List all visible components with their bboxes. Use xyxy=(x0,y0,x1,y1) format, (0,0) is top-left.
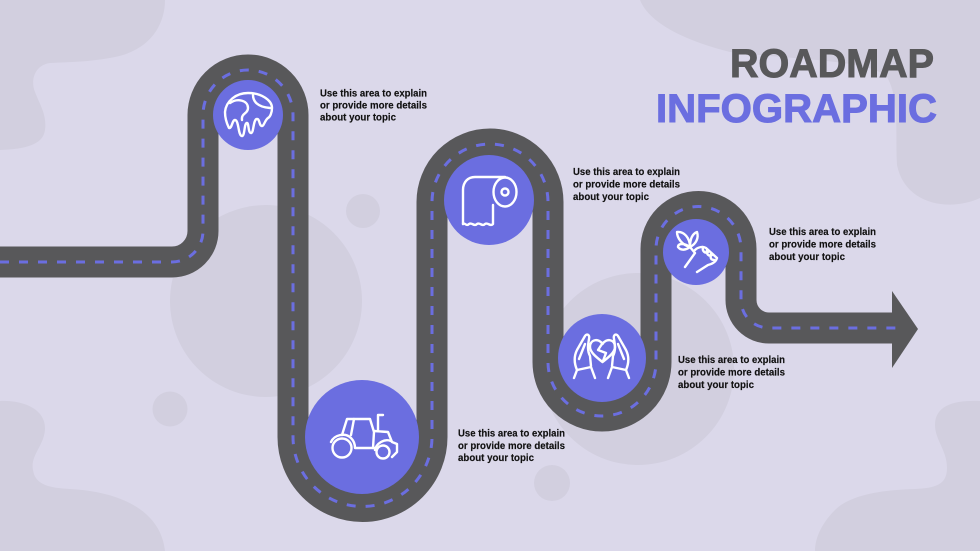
step 2: tractor icon circle xyxy=(305,380,419,494)
text block 4: Use this area to explain xyxy=(678,355,785,366)
road with arrow xyxy=(0,70,918,506)
text block 5: about your topic xyxy=(769,252,845,263)
step 1: globe icon circle xyxy=(213,80,283,150)
title: INFOGRAPHIC xyxy=(656,87,937,131)
title: ROADMAP xyxy=(730,42,934,86)
text block 4: or provide more details xyxy=(678,368,785,378)
step 5: hand holding plant icon circle xyxy=(663,219,729,285)
text block 5: or provide more details xyxy=(769,240,876,250)
step 3: toilet roll icon circle xyxy=(444,155,534,245)
text block 5: Use this area to explain xyxy=(769,227,876,238)
text block 2: or provide more details xyxy=(458,441,565,452)
text block 2: about your topic xyxy=(458,453,534,464)
text block 1: about your topic xyxy=(320,112,396,124)
text block 3: or provide more details xyxy=(573,180,680,190)
text block 2: Use this area to explain xyxy=(458,428,565,440)
text block 1: or provide more details xyxy=(320,100,427,112)
text block 4: about your topic xyxy=(678,380,754,391)
text block 1: Use this area to explain xyxy=(320,88,427,100)
text block 3: about your topic xyxy=(573,192,649,203)
title xyxy=(656,42,937,131)
step 4: hands with heart icon circle xyxy=(558,314,646,402)
text block 3: Use this area to explain xyxy=(573,167,680,178)
